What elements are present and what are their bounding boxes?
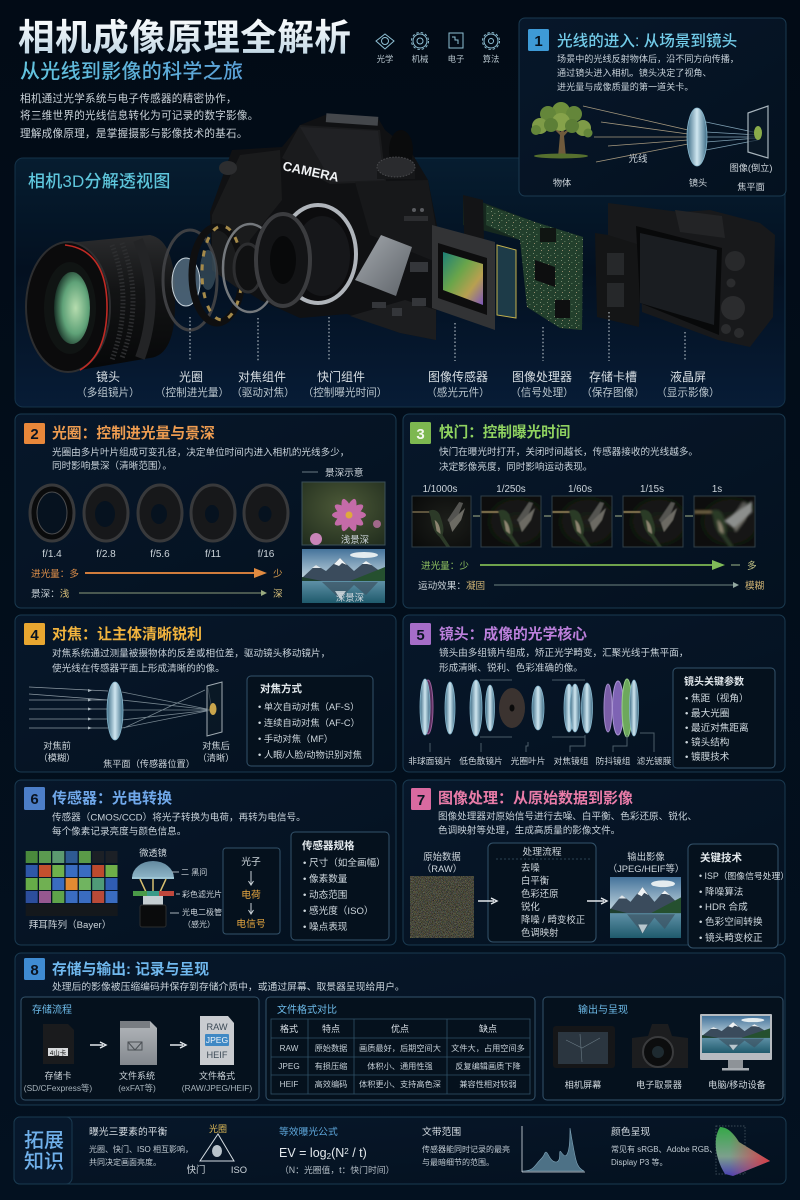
focus modes box — [247, 676, 373, 766]
table: 特点 — [322, 1023, 340, 1034]
light amount scale: 进光量：多 — [31, 568, 79, 580]
shutter speed labels: 1/15s — [640, 484, 664, 495]
exploded element: focus rings — [223, 214, 310, 312]
icon labels: 光学 — [377, 54, 393, 64]
badge 1 — [528, 29, 549, 51]
chart: color gamut — [716, 1126, 770, 1176]
text 1: 场景中的光线反射物体后，沿不同方向传播， — [557, 53, 739, 64]
output image: （JPEG/HEIF等） — [608, 863, 684, 874]
file format table box: 文件格式对比 — [277, 1003, 337, 1016]
pipeline box — [488, 843, 596, 942]
panel 2: aperture — [15, 414, 396, 608]
lens params box: • 最大光圈 — [685, 708, 729, 720]
conversion chain box: 电荷 — [241, 888, 261, 901]
light amount scale — [421, 560, 757, 572]
icon: file system — [120, 1021, 157, 1065]
icon: mechanics — [412, 32, 428, 50]
focus labels: （清晰） — [198, 752, 234, 763]
part labels: （控制进光量） — [155, 386, 229, 399]
key tech box: • HDR 合成 — [699, 901, 748, 913]
output labels: 电子取景器 — [636, 1079, 682, 1090]
image: shallow depth flower: 浅景深 — [341, 534, 369, 545]
raw data: 原始数据 — [423, 851, 461, 862]
exposure formula: / t) — [349, 1146, 367, 1160]
light amount scale: 多 — [747, 560, 757, 572]
icon: optics — [376, 34, 394, 49]
color rendering text: 颜色呈现 — [611, 1125, 650, 1138]
arrow: raw to pipeline — [478, 898, 497, 904]
part labels: （多组镜片） — [76, 386, 140, 399]
chart: histogram — [522, 1126, 585, 1172]
badge 5: 5 — [416, 627, 425, 644]
text 2: 光圈由多片叶片组成可变孔径，决定单位时间内进入相机的光线多少， — [52, 446, 349, 458]
text 6: 传感器（CMOS/CCD）将光子转换为电荷，再转为电信号。 — [52, 812, 306, 824]
icon: electronics — [449, 33, 463, 48]
text 7: 色调映射等处理，生成高质量的影像文件。 — [438, 824, 620, 836]
table: 兼容性相对较弱 — [459, 1079, 517, 1089]
text 2: 同时影响景深（清晰范围）。 — [52, 460, 172, 472]
depth scale: 景深：浅 — [31, 588, 70, 600]
lens — [687, 108, 707, 166]
focal plane with image — [748, 106, 768, 158]
icon: camera screen — [553, 1026, 615, 1068]
key tech box: • ISP（图像信号处理） — [699, 870, 789, 881]
focus labels: 对焦前 — [43, 740, 71, 751]
output box: 输出与呈现 — [578, 1003, 628, 1016]
light amount scale — [31, 568, 283, 580]
image: deep depth landscape: 深景深 — [336, 592, 364, 603]
heading 8: 存储与输出: 记录与呈现 — [52, 960, 209, 978]
color rendering text — [611, 1125, 717, 1167]
sensor specs box: 传感器规格 — [302, 839, 355, 852]
conversion chain box: 光子 — [241, 855, 261, 868]
bayer array — [26, 851, 118, 931]
exposure triangle diagram: 快门 — [187, 1164, 205, 1175]
panel 4: focus — [15, 615, 396, 772]
table: 原始数据 — [315, 1043, 347, 1053]
icon: file formats: RAW — [206, 1022, 228, 1032]
f-stop labels: f/1.4 — [42, 549, 62, 560]
icon labels: 电子 — [448, 54, 464, 64]
text 4: 使光线在传感器平面上形成清晰的的像。 — [52, 662, 225, 674]
f-stop labels: f/11 — [205, 549, 221, 560]
heading 4: 对焦：让主体清晰锐利 — [52, 625, 202, 643]
storage flow box: (RAW/JPEG/HEIF) — [182, 1083, 252, 1093]
microlens callouts: （感光） — [183, 919, 215, 929]
key tech box: • 降噪算法 — [699, 886, 744, 898]
sensor specs box — [291, 832, 389, 940]
f-stop labels: f/2.8 — [96, 549, 116, 560]
key tech box — [688, 844, 789, 948]
aperture rings — [30, 485, 288, 541]
conversion chain box: 电信号 — [236, 917, 266, 930]
microlens callouts: 光电二极管 — [182, 907, 222, 917]
intro text: 理解成像原理，是掌握摄影与影像技术的基石。 — [20, 127, 248, 140]
sensor specs box: • 尺寸（如全画幅） — [303, 857, 386, 869]
f-stop labels: f/5.6 — [150, 549, 170, 560]
part labels: （感光元件） — [426, 386, 490, 399]
raw data — [410, 851, 474, 938]
lens params box: • 最近对焦距离 — [685, 722, 749, 734]
exposure formula: EV = log — [279, 1146, 327, 1160]
exposure formula: (N — [331, 1146, 344, 1160]
table: 格式 — [280, 1023, 298, 1034]
extended knowledge tag — [14, 1117, 72, 1184]
heading 6: 传感器：光电转换 — [52, 789, 172, 807]
part labels: （显示影像） — [656, 386, 720, 399]
table: JPEG — [278, 1062, 300, 1071]
text 3: 决定影像亮度，同时影响运动表现。 — [439, 461, 592, 473]
badge 8: 8 — [30, 962, 39, 979]
motion effect scale: 模糊 — [745, 580, 764, 592]
microlens pixel diagram: 微透镜 — [139, 847, 167, 858]
output box — [543, 997, 783, 1100]
pipeline box: 去噪 — [521, 862, 540, 873]
table: 体积更小、支持高色深 — [359, 1079, 441, 1089]
badge 4: 4 — [30, 627, 39, 644]
title: 相机成像原理全解析 — [18, 17, 351, 58]
sensor specs box: • 噪点表现 — [303, 921, 348, 933]
icon: SD card — [43, 1024, 74, 1064]
part labels: 图像传感器 — [428, 369, 488, 384]
output labels: 相机屏幕 — [565, 1079, 601, 1090]
dynamic range text: 传感器能同时记录的最亮 — [422, 1144, 510, 1154]
heading 5: 镜头：成像的光学核心 — [439, 625, 587, 643]
table: 画质最好，后期空间大 — [359, 1043, 441, 1053]
table: RAW — [280, 1044, 299, 1053]
focus modes box: • 单次自动对焦（AF-S） — [258, 701, 359, 712]
part labels: （保存图像） — [581, 386, 645, 399]
exposure triangle diagram: 光圈 — [209, 1123, 227, 1134]
exposure triangle diagram: ISO — [231, 1164, 247, 1175]
light rays — [583, 106, 758, 162]
part labels: 液晶屏 — [670, 369, 706, 384]
lens element array — [420, 679, 654, 752]
focus labels: 焦平面（传感器位置） — [103, 758, 195, 769]
exploded element: image processor board — [463, 195, 583, 330]
footer panel: extended knowledge — [14, 1117, 786, 1184]
table: HEIF — [280, 1080, 298, 1089]
sensor specs box: • 动态范围 — [303, 889, 347, 901]
exposure triangle text: 曝光三要素的平衡 — [89, 1125, 168, 1138]
diagram labels: 焦平面 — [737, 181, 765, 192]
microlens pixel diagram — [132, 847, 174, 927]
lens element labels: 光圈叶片 — [511, 755, 545, 766]
lens element labels: 低色散镜片 — [459, 755, 503, 766]
badge 1: 1 — [534, 33, 543, 50]
text 3: 快门在曝光时打开，关闭时间越长，传感器接收的光线越多。 — [439, 446, 698, 458]
dynamic range text: 与最暗细节的范围。 — [422, 1157, 494, 1167]
panel: 3D exploded view — [15, 113, 785, 407]
text 5: 形成清晰、锐利、色彩准确的像。 — [439, 662, 583, 674]
microlens callouts: 二 黑问 — [181, 868, 207, 877]
table: 高效编码 — [315, 1079, 347, 1089]
bayer array: 拜耳阵列（Bayer） — [29, 919, 111, 931]
storage labels: 存储卡 — [44, 1070, 72, 1081]
shutter speed labels: 1/60s — [568, 484, 592, 495]
part labels: 存储卡槽 — [589, 369, 637, 384]
icon: file formats: HEIF — [207, 1050, 228, 1060]
key tech box: 关键技术 — [700, 851, 742, 864]
table: 反复编辑画质下降 — [455, 1061, 521, 1071]
lens params box: • 镜头结构 — [685, 736, 729, 748]
extended knowledge tag: 拓展 — [24, 1129, 64, 1152]
image: shallow depth flower — [302, 482, 385, 545]
motion effect scale: 运动效果：凝固 — [418, 580, 485, 592]
motion effect scale — [418, 580, 764, 592]
focus modes box: • 连续自动对焦（AF-C） — [258, 717, 360, 728]
pipeline box: 色彩还原 — [521, 888, 559, 899]
storage labels: 文件系统 — [119, 1070, 155, 1081]
part labels: 图像处理器 — [512, 370, 572, 384]
intro text: 将三维世界的光线信息转化为可记录的数字影像。 — [20, 109, 259, 122]
exposure triangle text: 光圈、快门、ISO 相互影响， — [89, 1144, 193, 1154]
exposure formula — [279, 1125, 394, 1175]
dynamic range text: 文带范围 — [422, 1125, 461, 1138]
part labels — [76, 369, 720, 399]
icon: tree — [531, 102, 592, 158]
storage flow box: (exFAT等) — [118, 1083, 156, 1093]
key tech box: • 色彩空间转换 — [699, 916, 763, 928]
lens params box — [673, 668, 775, 768]
color rendering text: 常见有 sRGB、Adobe RGB、 — [611, 1144, 717, 1154]
exposure formula: 2 — [327, 1152, 332, 1161]
text 5: 镜头由多组镜片组成，矫正光学畸变，汇聚光线于焦平面， — [439, 647, 688, 659]
storage flow box: 存储流程 — [32, 1003, 72, 1016]
icon: file formats: JPEG — [206, 1035, 229, 1045]
lens element labels: 对焦镜组 — [554, 755, 589, 766]
diagram labels: 物体 — [553, 177, 571, 188]
badge 2: 2 — [30, 426, 39, 443]
exploded element: image sensor — [432, 225, 516, 330]
intro text: 相机通过光学系统与电子传感器的精密协作， — [20, 92, 237, 105]
badge 6: 6 — [30, 791, 39, 808]
text 7: 图像处理器对原始信号进行去噪、白平衡、色彩还原、锐化、 — [438, 810, 697, 822]
lens element labels: 防抖镜组 — [596, 755, 631, 766]
file format table box — [266, 997, 535, 1100]
focus modes box: • 手动对焦（MF） — [258, 733, 333, 744]
text 1: 通过镜头进入相机。镜头决定了视角、 — [557, 67, 712, 78]
lens element labels: 非球面镜片 — [408, 755, 452, 766]
badge 4 — [24, 623, 45, 645]
dynamic range text — [422, 1125, 510, 1167]
exploded element: aperture rings — [163, 226, 242, 330]
panel 7: image processing — [403, 780, 789, 948]
badge 7 — [411, 788, 431, 810]
panel 8: storage and output — [15, 953, 785, 1105]
storage labels: 文件格式 — [199, 1070, 235, 1081]
exploded element: rear LCD body — [608, 203, 775, 347]
badge 3: 3 — [416, 426, 425, 443]
arrow: pipeline to output — [587, 898, 607, 904]
pipeline box: 锐化 — [521, 901, 540, 912]
text 1: 进光量与成像质量的第一道关卡。 — [557, 81, 693, 92]
color rendering text: Display P3 等。 — [611, 1157, 667, 1167]
part labels: （信号处理） — [510, 386, 574, 399]
badge 2 — [24, 423, 45, 444]
part labels: 光圈 — [179, 370, 203, 384]
panel 3: shutter — [403, 414, 785, 608]
icon: SD card: 4山卡 — [50, 1048, 67, 1057]
icon: algorithms — [482, 32, 500, 50]
heading: exploded view: 相机3D分解透视图 — [28, 172, 171, 191]
table: 体积小、通用性强 — [367, 1061, 433, 1071]
extended knowledge tag: 知识 — [24, 1150, 64, 1173]
depth demo caption — [302, 467, 363, 479]
microlens callouts: 彩色滤光片 — [182, 889, 222, 899]
focus labels: 对焦后 — [202, 740, 230, 751]
text 8: 处理后的影像被压缩编码并保存到存储介质中，或通过屏幕、取景器呈现给用户。 — [52, 980, 405, 993]
badge 3 — [410, 422, 431, 444]
lens element labels: 滤光镀膜 — [637, 755, 672, 766]
leader lines — [190, 312, 685, 361]
pipeline box: 处理流程 — [522, 845, 562, 858]
panel 6: sensor — [15, 780, 396, 945]
output labels: 电脑/移动设备 — [708, 1079, 766, 1090]
heading 2: 光圈：控制进光量与景深 — [52, 424, 215, 442]
shutter speed labels: 1s — [712, 484, 722, 495]
exploded element: memory card slot — [595, 233, 642, 327]
exposure formula: 2 — [344, 1147, 349, 1156]
icon row: four disciplines — [376, 32, 500, 64]
pipeline box: 色调映射 — [521, 927, 559, 938]
exposure triangle diagram — [187, 1123, 247, 1175]
label: rays: 光线 — [628, 153, 648, 165]
light amount scale: 少 — [273, 569, 283, 580]
depth scale — [31, 588, 283, 600]
focus modes box: • 人眼/人脸/动物识别对焦 — [258, 749, 362, 760]
lens params box: • 镀膜技术 — [685, 751, 730, 763]
lens params box: 镜头关键参数 — [684, 675, 744, 688]
depth demo caption: 景深示意 — [325, 467, 363, 479]
part labels: （控制曝光时间） — [303, 386, 387, 399]
table — [271, 1019, 530, 1094]
f-stop labels: f/16 — [258, 549, 275, 560]
lens mount — [280, 205, 356, 303]
camera brand text: CAMERA — [281, 158, 341, 185]
table: 文件大，占用空间多 — [451, 1043, 525, 1053]
icon: viewfinder camera — [632, 1024, 688, 1068]
hummingbird sequence — [412, 496, 755, 547]
output image: 输出影像 — [627, 851, 665, 862]
storage flow box — [21, 997, 259, 1100]
pipeline box: 降噪 / 畸变校正 — [521, 914, 585, 925]
exposure triangle text: 共同决定画面亮度。 — [89, 1157, 161, 1167]
light amount scale: 进光量：少 — [421, 560, 469, 572]
shutter speed labels: 1/1000s — [423, 484, 458, 495]
badge 7: 7 — [417, 792, 425, 809]
heading 7: 图像处理：从原始数据到影像 — [438, 789, 633, 807]
lens params box: • 焦距（视角） — [685, 692, 749, 704]
text 4: 对焦系统通过测量被摄物体的反差或相位差，驱动镜头移动镜片， — [52, 648, 330, 660]
heading 3: 快门：控制曝光时间 — [439, 423, 570, 441]
part labels: 对焦组件 — [238, 370, 286, 384]
badge 5 — [410, 623, 431, 645]
diagram labels: 图像(倒立) — [730, 162, 772, 173]
storage flow box: (SD/CFexpress等) — [24, 1083, 92, 1093]
text 6: 每个像素记录亮度与颜色信息。 — [52, 826, 186, 838]
focus ray diagram — [29, 682, 222, 740]
arrow — [170, 1042, 186, 1048]
header title block — [18, 17, 351, 140]
part labels: 镜头 — [96, 369, 120, 384]
table: 优点 — [391, 1023, 409, 1034]
table: 缺点 — [479, 1023, 497, 1034]
depth scale: 深 — [273, 589, 283, 600]
raw data: （RAW） — [422, 863, 462, 874]
exposure formula: （N：光圈值，t：快门时间） — [280, 1164, 394, 1175]
arrow — [90, 1042, 106, 1048]
panel 1: light entering — [519, 18, 786, 196]
microlens callouts — [170, 868, 222, 929]
shutter speed labels: 1/250s — [496, 484, 526, 495]
panel 5: lens — [403, 615, 785, 772]
key tech box: • 镜头畸变校正 — [699, 932, 763, 944]
diagram labels: 镜头 — [689, 177, 707, 188]
focus modes box: 对焦方式 — [260, 682, 302, 695]
output image — [608, 851, 684, 938]
subtitle: 从光线到影像的科学之旅 — [20, 60, 243, 83]
icon labels: 算法 — [483, 54, 499, 64]
badge 6 — [24, 787, 45, 810]
heading 1: 光线的进入: 从场景到镜头 — [557, 31, 737, 50]
camera body — [210, 113, 437, 340]
sensor specs box: • 像素数量 — [303, 873, 348, 885]
exposure formula: 等效曝光公式 — [279, 1125, 338, 1138]
image: deep depth landscape — [302, 549, 385, 603]
part labels: （驱动对焦） — [231, 386, 295, 399]
conversion chain box — [223, 848, 280, 934]
badge 8 — [24, 958, 45, 980]
pipeline box: 白平衡 — [521, 875, 549, 886]
table: 有损压缩 — [315, 1061, 347, 1071]
flip mirror flap — [355, 235, 412, 296]
focus labels: （模糊） — [39, 752, 75, 763]
icon: computer monitor — [700, 1014, 772, 1070]
part labels: 快门组件 — [317, 369, 365, 384]
icon labels: 机械 — [412, 54, 429, 64]
exploded element: main lens — [26, 235, 175, 372]
exposure triangle text — [89, 1125, 193, 1167]
sensor specs box: • 感光度（ISO） — [303, 905, 374, 917]
icon: file formats — [200, 1016, 234, 1065]
